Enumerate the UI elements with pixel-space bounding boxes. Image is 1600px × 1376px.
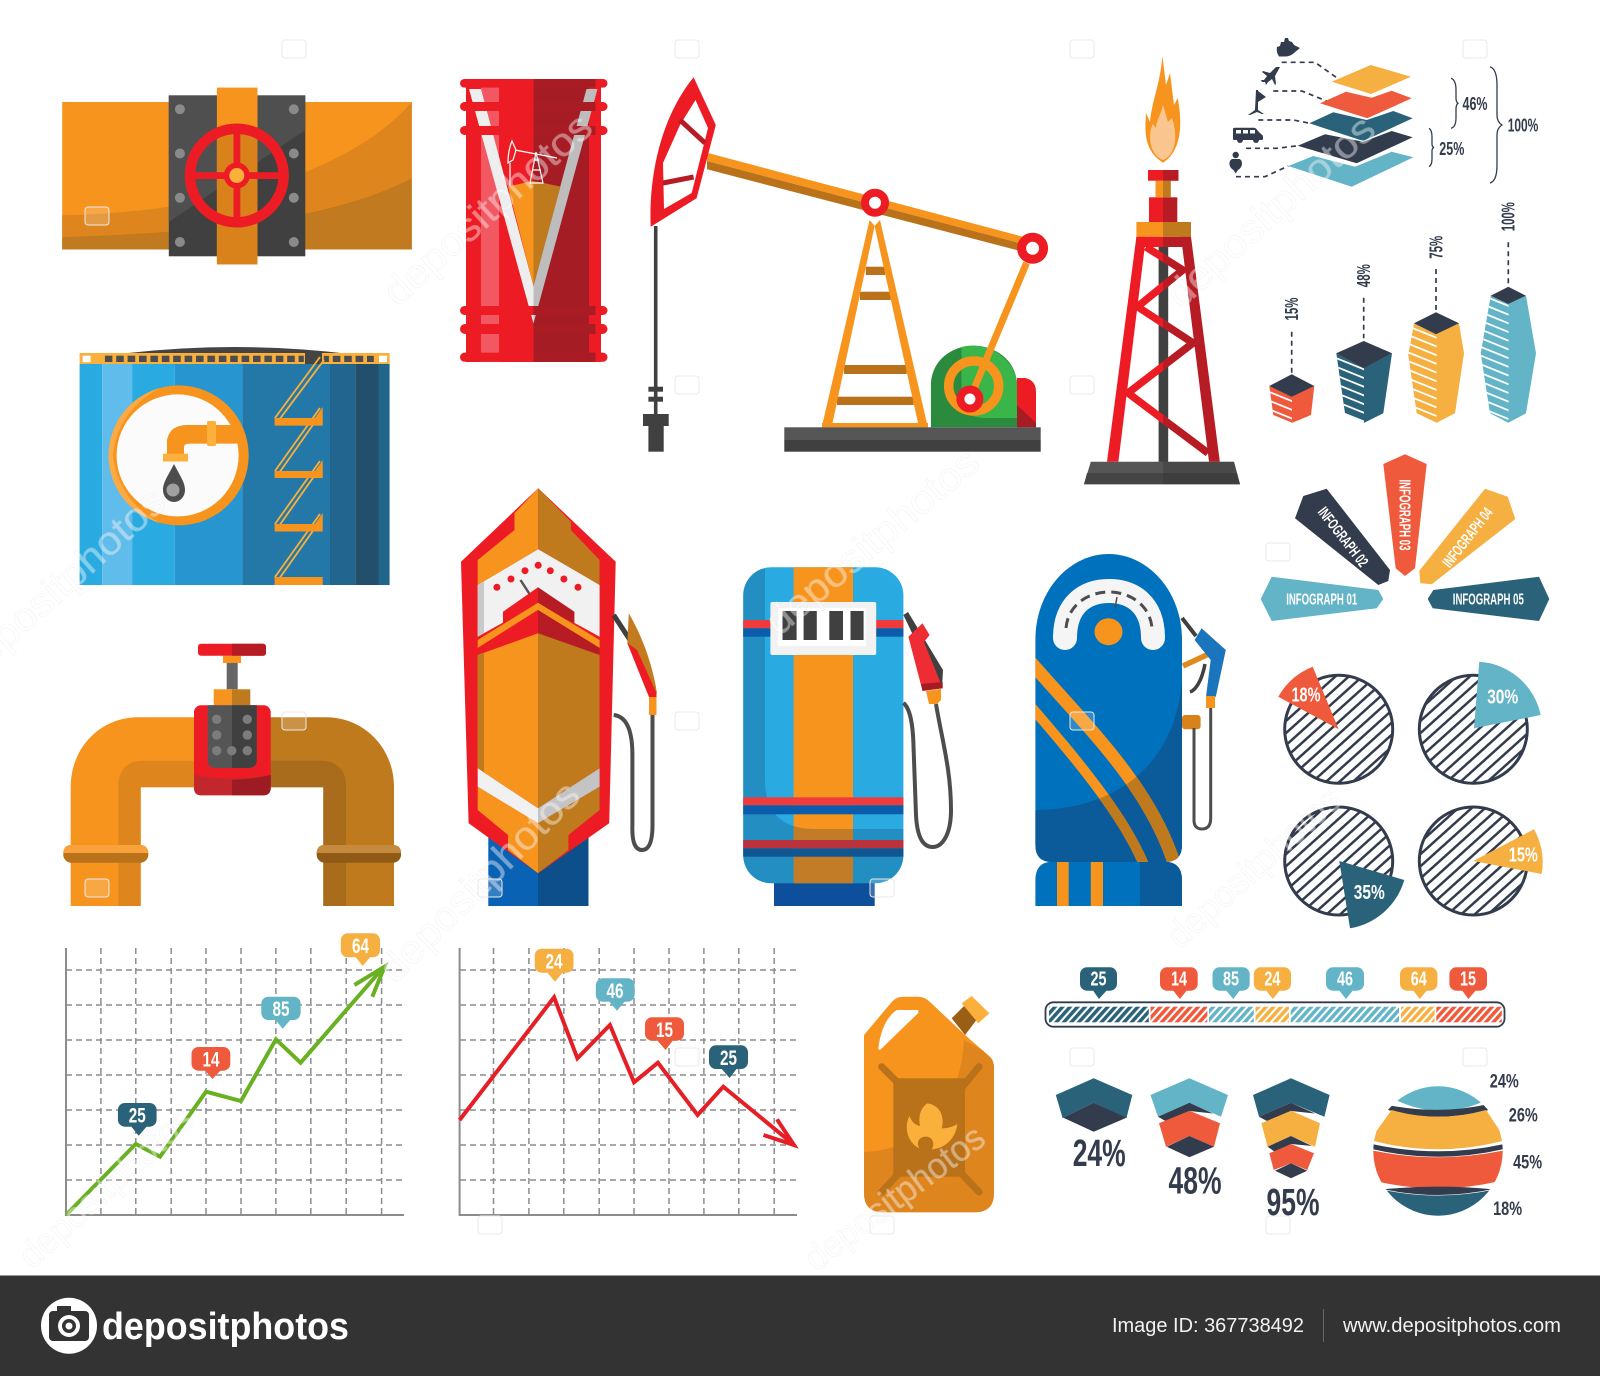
icon: van	[1233, 128, 1263, 143]
pie 30 percent	[1419, 662, 1541, 783]
stacked shield 24 percent	[1056, 1078, 1132, 1175]
sphere slices	[1373, 1086, 1503, 1216]
bubble 25: 25	[720, 1047, 737, 1070]
gate valve	[194, 644, 271, 795]
price display	[770, 602, 876, 655]
stack layers	[1288, 65, 1413, 187]
nozzle and hose	[1182, 618, 1226, 829]
watermark text: depositphotos	[757, 440, 988, 644]
pipeline section with wheel valve	[62, 88, 412, 264]
sphere labels: 24%	[1490, 1072, 1519, 1092]
flame	[1145, 56, 1180, 163]
icon: flame	[907, 1103, 957, 1149]
derrick head	[1136, 170, 1191, 237]
watermark text: depositphotos	[1158, 778, 1349, 956]
petal 05: INFOGRAPH 05	[1453, 592, 1524, 608]
dial panel	[478, 549, 600, 637]
bar 48 percent: 48%	[1354, 264, 1374, 287]
bubble 15	[1449, 967, 1487, 999]
isometric bar chart	[1269, 202, 1536, 423]
bubble 25	[1080, 967, 1117, 999]
sphere labels	[1490, 1072, 1542, 1220]
pie 18 percent: 18%	[1292, 684, 1321, 706]
chart grid	[66, 948, 404, 1215]
petal 04: INFOGRAPH 04	[1440, 505, 1497, 571]
pie 30 percent: 30%	[1487, 686, 1518, 708]
petal 01	[1261, 577, 1383, 621]
fan of infograph labels	[1261, 454, 1549, 621]
icon: person	[1229, 152, 1242, 174]
bubble 15: 15	[1460, 968, 1476, 990]
watermark text: depositphotos	[375, 105, 601, 315]
stacked shield 95 percent	[1253, 1078, 1330, 1224]
tank body	[80, 364, 390, 585]
can emboss	[882, 1067, 979, 1192]
bar 75 percent: 75%	[1426, 236, 1446, 259]
watermark text	[0, 105, 1384, 1278]
logo camera badge	[41, 1298, 97, 1354]
watermark text: depositphotos	[370, 773, 589, 991]
pie 15 percent: 15%	[1509, 844, 1538, 866]
nozzle and hose	[903, 612, 951, 847]
icon: red valve wheel	[186, 125, 287, 226]
bar 75 percent	[1408, 236, 1464, 423]
bubble 25: 25	[129, 1104, 146, 1128]
brace 46 percent	[1451, 78, 1458, 128]
petal 02	[1295, 489, 1390, 585]
icon: airplane	[1261, 67, 1280, 85]
gearbox	[931, 263, 1036, 427]
bubble 46	[596, 978, 635, 1011]
gas pump one: red and orange	[461, 488, 657, 906]
semicircular gauge	[1065, 591, 1153, 645]
segmented sphere chart	[1370, 1072, 1542, 1225]
bubble 25	[709, 1045, 748, 1078]
bubble 14	[192, 1047, 230, 1079]
bubble 14: 14	[1171, 968, 1188, 990]
bar 15 percent: 15%	[1282, 298, 1302, 320]
jerry can	[864, 996, 994, 1212]
website url: www.depositphotos.com	[1342, 1315, 1561, 1337]
bar 15 percent	[1269, 298, 1314, 423]
gas pump two: blue with display	[743, 567, 951, 906]
sphere labels: 18%	[1493, 1199, 1522, 1220]
stacked shield 95 percent: 95%	[1266, 1182, 1320, 1224]
falling line chart	[460, 948, 797, 1215]
pie 18 percent	[1278, 667, 1393, 783]
bubble 25	[118, 1103, 157, 1136]
pie 35 percent: 35%	[1354, 882, 1385, 904]
red trend line	[460, 997, 794, 1145]
label 25 percent: 25%	[1439, 139, 1464, 159]
bubble 14: 14	[202, 1048, 220, 1072]
bar track	[1046, 1002, 1504, 1027]
bubble 24: 24	[1264, 968, 1281, 990]
stacked shield 48 percent: 48%	[1168, 1161, 1222, 1203]
bar 48 percent	[1336, 264, 1392, 423]
bubble 14	[1160, 967, 1198, 999]
A-frame tower	[822, 220, 928, 427]
watermark camera stamps	[85, 40, 1487, 1234]
pump jack	[643, 77, 1044, 452]
bubble 85: 85	[1223, 968, 1239, 990]
petal 01: INFOGRAPH 01	[1286, 592, 1357, 608]
segmented progress bar with bubbles	[1046, 967, 1504, 1027]
icon: oil drop	[163, 464, 185, 502]
bubble 85	[1212, 967, 1250, 999]
petal 02: INFOGRAPH 02	[1314, 504, 1371, 571]
oil derrick with flame	[1084, 56, 1240, 484]
crank joint	[1022, 237, 1044, 259]
petal 03: INFOGRAPH 03	[1396, 480, 1412, 551]
watermark text: depositphotos	[796, 1116, 993, 1278]
petal 04	[1419, 489, 1515, 584]
chart grid	[460, 948, 797, 1215]
bubble 24	[1254, 967, 1291, 999]
icon: ship	[1277, 38, 1300, 57]
arched pipe with valve	[63, 644, 401, 906]
petal 05	[1428, 577, 1549, 621]
icon: faucet	[163, 421, 240, 462]
layered stack diagram	[1229, 38, 1538, 187]
bubble 25: 25	[1090, 968, 1106, 990]
gas pump three: rounded blue	[1028, 550, 1226, 906]
bubble 64: 64	[1411, 968, 1427, 990]
bubble 24: 24	[546, 950, 563, 974]
pie 15 percent	[1419, 807, 1543, 915]
rising line chart	[66, 933, 404, 1215]
brace 25 percent	[1429, 128, 1434, 167]
bubble 24	[535, 949, 574, 982]
bar 100 percent: 100%	[1498, 202, 1518, 231]
derrick lattice	[1107, 237, 1220, 462]
brace 100 percent	[1490, 67, 1502, 183]
petal 03	[1383, 454, 1427, 576]
bar 100 percent	[1481, 202, 1536, 423]
bubble 46	[1326, 967, 1364, 999]
image id: Image ID: 367738492	[1112, 1315, 1304, 1337]
polished rod and wellhead	[643, 226, 669, 452]
walking beam	[707, 153, 1023, 252]
sphere labels: 45%	[1513, 1152, 1542, 1174]
dashed connectors	[1236, 62, 1340, 177]
pivot bearing	[865, 193, 885, 213]
stacked shield 48 percent	[1150, 1078, 1228, 1203]
bubble 85	[261, 997, 301, 1029]
hatched pie charts	[1278, 662, 1543, 928]
zigzag stairs	[275, 357, 324, 585]
label 100 percent: 100%	[1508, 116, 1538, 136]
gauge circle with faucet	[109, 385, 249, 525]
base plate	[784, 427, 1041, 452]
bubble 46: 46	[1337, 968, 1353, 990]
brand wordmark: depositphotos	[102, 1306, 349, 1348]
label 46 percent: 46%	[1462, 94, 1488, 114]
bubble 64: 64	[352, 935, 369, 958]
sphere labels: 26%	[1509, 1106, 1538, 1126]
right flange	[317, 845, 401, 863]
footer band	[0, 1276, 1600, 1376]
nozzle and hose	[614, 613, 657, 850]
watermark text: depositphotos	[10, 1098, 201, 1276]
left flange	[63, 845, 148, 863]
bubble 15: 15	[656, 1019, 673, 1042]
pump base	[1035, 862, 1182, 906]
roof railing	[80, 353, 390, 364]
red oil barrel	[460, 79, 608, 362]
bubble 15	[645, 1017, 684, 1050]
derrick base	[1084, 462, 1240, 484]
icon: flag	[1248, 90, 1266, 115]
stacked shield 24 percent: 24%	[1073, 1133, 1126, 1175]
storage tank	[80, 347, 390, 585]
horse head	[650, 77, 716, 227]
bubble 64	[1400, 967, 1437, 999]
bubble 85: 85	[272, 998, 290, 1021]
bubble 46: 46	[606, 980, 624, 1003]
watermark text: depositphotos	[1158, 107, 1384, 317]
bubble 64	[341, 933, 380, 966]
icon: tiny pump jack on barrel	[508, 141, 557, 186]
green trend line	[66, 967, 384, 1215]
pie 35 percent	[1285, 807, 1404, 928]
